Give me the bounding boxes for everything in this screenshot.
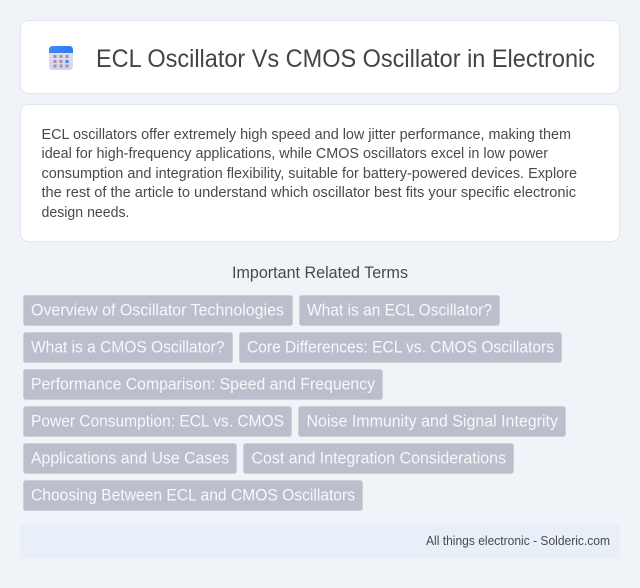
tag: core differences bbox=[240, 332, 562, 362]
panel: title header bbox=[20, 20, 620, 94]
tag: CMOS oscillator bbox=[24, 332, 232, 362]
tag: choosing bbox=[24, 480, 362, 510]
tag: overview bbox=[24, 296, 292, 326]
tag: noise immunity bbox=[298, 406, 566, 436]
footer: All things electronic - Solderic.com bbox=[426, 534, 610, 548]
panel: summary paragraph: the rest of the article to understand which oscillator best fits your specific electronic bbox=[42, 185, 576, 201]
tag: cost and integration bbox=[244, 444, 514, 474]
tag: core differences: Core Differences: ECL vs. CMOS Oscillators bbox=[247, 338, 554, 356]
tag: performance bbox=[24, 370, 382, 400]
tag: choosing: Choosing Between ECL and CMOS Oscillators bbox=[31, 486, 355, 504]
tag: applications: Applications and Use Cases bbox=[31, 450, 229, 468]
tag: power consumption: Power Consumption: ECL vs. CMOS bbox=[31, 412, 284, 430]
tag: noise immunity: Noise Immunity and Signal Integrity bbox=[306, 412, 559, 430]
tag: applications bbox=[24, 444, 236, 474]
tag: ECL oscillator: What is an ECL Oscillator? bbox=[307, 302, 492, 320]
panel: summary paragraph: ideal for high-frequency applications, while CMOS oscillators excel in low power bbox=[42, 146, 548, 162]
tag: cost and integration: Cost and Integration Considerations bbox=[252, 450, 506, 468]
icon: calendar bbox=[49, 46, 73, 70]
tag: CMOS oscillator: What is a CMOS Oscillator? bbox=[31, 338, 224, 356]
tag: overview: Overview of Oscillator Technologies bbox=[31, 302, 284, 320]
panel: summary paragraph: ECL oscillators offer extremely high speed and low jitter performance, making them bbox=[42, 127, 571, 143]
tag: performance: Performance Comparison: Speed and Frequency bbox=[31, 376, 376, 394]
panel: summary paragraph: consumption and integration flexibility, suitable for battery-powered devices. Explore bbox=[42, 166, 577, 182]
heading: related terms: Important Related Terms bbox=[232, 264, 408, 282]
panel: summary paragraph: design needs. bbox=[42, 205, 130, 221]
tag: power consumption bbox=[24, 406, 292, 436]
title: ECL Oscillator Vs CMOS Oscillator in Electronic bbox=[96, 45, 595, 73]
tag: ECL oscillator bbox=[300, 296, 500, 326]
footer bbox=[20, 524, 620, 558]
panel: summary paragraph bbox=[20, 104, 620, 242]
